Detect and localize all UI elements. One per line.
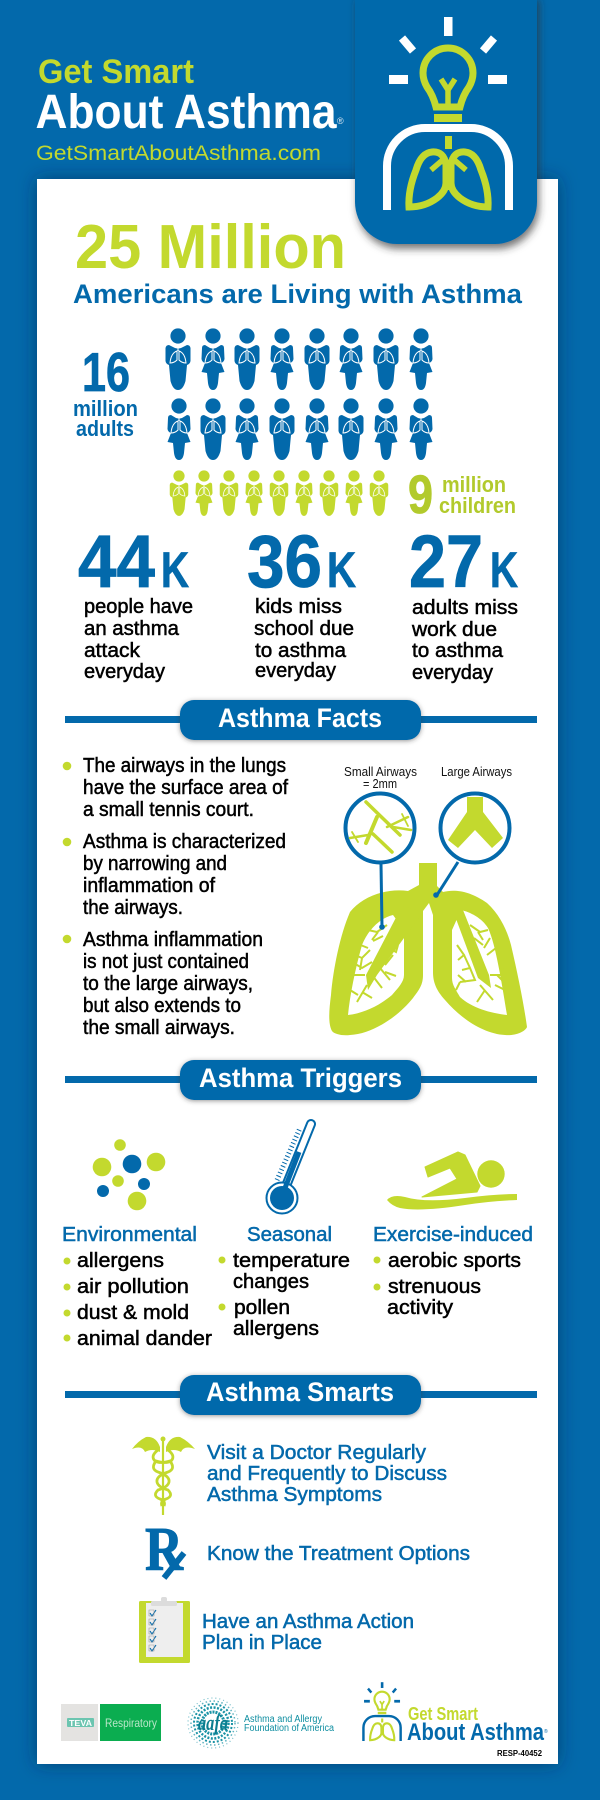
column: environmental triggers: dust & mold bbox=[77, 1302, 189, 1324]
icon: caduceus bbox=[132, 1436, 195, 1515]
column: seasonal triggers: changes bbox=[233, 1271, 309, 1293]
lungs diagram: = 2mm bbox=[363, 776, 397, 791]
stat: 27K: work due bbox=[411, 619, 497, 641]
fact list: by narrowing and bbox=[83, 853, 227, 875]
header logo text: GetSmartAboutAsthma.com bbox=[36, 142, 321, 165]
column: exercise-induced triggers: strenuous bbox=[388, 1276, 481, 1298]
stat: 44K: an asthma bbox=[84, 618, 180, 640]
headline: 25 Million: 25 Million bbox=[75, 213, 346, 282]
section heading: Asthma Triggers: Asthma Triggers bbox=[199, 1063, 402, 1093]
stat: 36K: K bbox=[327, 542, 356, 598]
stat: 16 million adults: adults bbox=[76, 416, 134, 441]
column: environmental triggers: air pollution bbox=[77, 1276, 189, 1298]
stat: 36K: 36 bbox=[247, 520, 322, 603]
icon: clipboard bbox=[139, 1597, 190, 1663]
section heading: Asthma Smarts: Asthma Smarts bbox=[206, 1377, 394, 1407]
column: exercise-induced triggers: activity bbox=[387, 1297, 453, 1319]
stat: 9 million children bbox=[408, 465, 516, 525]
stat: 44K: 44 bbox=[78, 520, 155, 603]
column: environmental triggers: allergens bbox=[77, 1250, 164, 1272]
lungs diagram: Large Airways bbox=[441, 764, 512, 779]
column: seasonal triggers: Seasonal bbox=[247, 1224, 332, 1246]
stat: 36K: everyday bbox=[255, 660, 336, 682]
logo: Teva Respiratory: Respiratory bbox=[105, 1716, 157, 1730]
fact list: have the surface area of bbox=[83, 777, 288, 799]
icon: Rx: R bbox=[145, 1516, 184, 1584]
text: visit a doctor: and Frequently to Discuss bbox=[207, 1463, 447, 1485]
column: exercise-induced triggers: Exercise-induced bbox=[373, 1224, 533, 1246]
fact list: inflammation of bbox=[83, 875, 215, 897]
text: visit a doctor bbox=[207, 1442, 447, 1506]
fact list: a small tennis court. bbox=[83, 799, 254, 821]
section heading: Asthma Smarts bbox=[65, 1375, 537, 1415]
logo: Asthma and Allergy Foundation of America: aafa bbox=[198, 1710, 228, 1735]
stat: 16 million adults: million bbox=[73, 396, 138, 421]
logo: Asthma and Allergy Foundation of America: Asthma and Allergy bbox=[244, 1714, 322, 1725]
stat: 16 million adults bbox=[73, 341, 138, 441]
text: visit a doctor: Visit a Doctor Regularly bbox=[207, 1442, 426, 1464]
stat: 27K: everyday bbox=[412, 662, 493, 684]
header logo text: ® bbox=[337, 116, 344, 126]
logo: Asthma and Allergy Foundation of America: Foundation of America bbox=[244, 1723, 334, 1734]
stat: 36K: kids miss bbox=[255, 596, 342, 618]
logo: Get Smart About Asthma bbox=[363, 1682, 548, 1746]
stat: 27K: 27 bbox=[409, 520, 483, 603]
icon: swimmer bbox=[387, 1152, 517, 1209]
fact list: the airways. bbox=[83, 897, 183, 919]
stat: 27K: K bbox=[490, 542, 518, 598]
fact list: the small airways. bbox=[83, 1017, 235, 1039]
stat: 44K: everyday bbox=[84, 661, 165, 683]
text: action plan bbox=[202, 1611, 414, 1654]
lungs diagram bbox=[329, 764, 527, 1035]
column: exercise-induced triggers: aerobic sports bbox=[388, 1250, 521, 1272]
stat: 44K: people have bbox=[84, 596, 193, 618]
logo: Asthma and Allergy Foundation of America bbox=[188, 1698, 334, 1748]
fact list: Asthma inflammation bbox=[83, 929, 263, 951]
stat: 9 million children: 9 bbox=[408, 465, 433, 525]
tab: lightbulb and lungs icon bbox=[355, 0, 537, 244]
text: action plan: Plan in Place bbox=[202, 1632, 322, 1654]
subheadline: Americans are Living with Asthma bbox=[73, 279, 523, 309]
white content panel bbox=[37, 179, 558, 1764]
section heading: Asthma Triggers bbox=[65, 1060, 537, 1100]
stat: 27K: to asthma bbox=[412, 640, 504, 662]
fact list: Asthma is characterized bbox=[83, 831, 286, 853]
icon: environmental particles bbox=[93, 1139, 165, 1210]
logo: Teva Respiratory: TEVA bbox=[69, 1718, 92, 1728]
stat: 9 million children: children bbox=[439, 493, 516, 518]
header logo text: Get Smart bbox=[38, 53, 194, 91]
icon: thermometer bbox=[266, 1124, 311, 1214]
column: environmental triggers bbox=[62, 1224, 212, 1350]
stat: 44K: attack bbox=[84, 640, 141, 662]
logo: Teva Respiratory bbox=[61, 1704, 161, 1741]
column: seasonal triggers: allergens bbox=[233, 1318, 319, 1340]
logo: Get Smart About Asthma: ® bbox=[544, 1728, 548, 1735]
fact list bbox=[63, 755, 288, 1039]
header logo text bbox=[36, 53, 344, 165]
stat: 16 million adults: 16 bbox=[82, 341, 130, 403]
text: visit a doctor: Asthma Symptoms bbox=[207, 1484, 382, 1506]
stat: 44K bbox=[78, 520, 193, 683]
section heading: Asthma Facts bbox=[65, 700, 537, 740]
stat: 36K bbox=[247, 520, 356, 682]
code: RESP-40452: RESP-40452 bbox=[497, 1749, 543, 1758]
stat: 9 million children: million bbox=[442, 472, 506, 497]
stat: 27K bbox=[409, 520, 518, 684]
lungs diagram: Small Airways bbox=[344, 764, 417, 779]
column: exercise-induced triggers bbox=[373, 1224, 533, 1319]
fact list: but also extends to bbox=[83, 995, 241, 1017]
logo: Get Smart About Asthma: Get Smart bbox=[408, 1704, 478, 1724]
stat: 44K: K bbox=[161, 542, 189, 598]
stat: 27K: adults miss bbox=[412, 597, 518, 619]
column: seasonal triggers: temperature bbox=[233, 1250, 350, 1272]
column: environmental triggers: Environmental bbox=[62, 1224, 197, 1246]
stat: 36K: school due bbox=[254, 618, 354, 640]
column: environmental triggers: animal dander bbox=[77, 1328, 212, 1350]
header logo text: About Asthma bbox=[36, 86, 337, 139]
text: treatment options: Know the Treatment Options bbox=[207, 1543, 470, 1565]
column: seasonal triggers bbox=[218, 1224, 350, 1340]
fact list: The airways in the lungs bbox=[83, 755, 286, 777]
stat: 36K: to asthma bbox=[255, 640, 347, 662]
section heading: Asthma Facts: Asthma Facts bbox=[218, 703, 382, 733]
fact list: is not just contained bbox=[83, 951, 249, 973]
column: seasonal triggers: pollen bbox=[234, 1297, 290, 1319]
pictogram: adults bbox=[166, 328, 432, 460]
text: action plan: Have an Asthma Action bbox=[202, 1611, 414, 1633]
pictogram: children bbox=[170, 470, 388, 516]
fact list: to the large airways, bbox=[83, 973, 253, 995]
logo: Get Smart About Asthma: About Asthma bbox=[407, 1719, 545, 1746]
